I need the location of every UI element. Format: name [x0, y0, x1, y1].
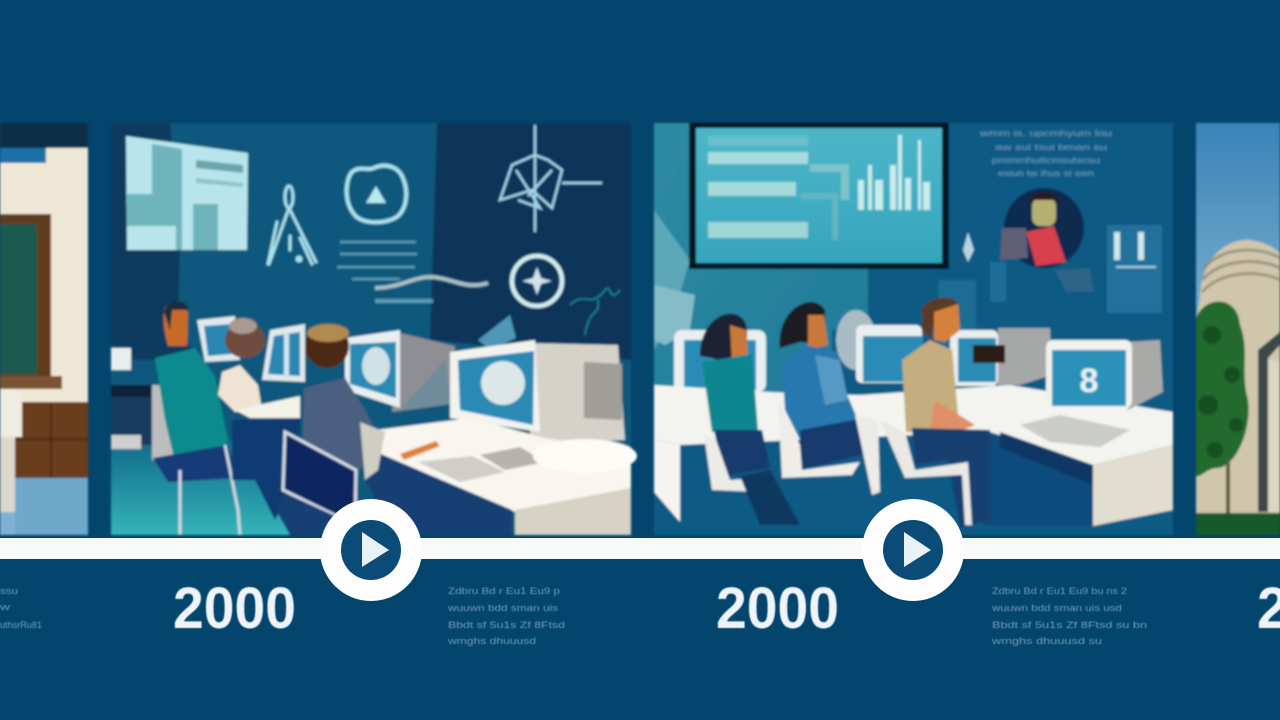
wall card: right: [1107, 225, 1162, 313]
timeline node 2: play button: [862, 499, 964, 601]
caption text above portrait: wmm is. upcmhyum Iou: [978, 129, 1112, 138]
caption text right: Bbdt sf 5u1s Zf 8Ftsd su bn: [992, 620, 1147, 630]
desk: [654, 385, 1173, 526]
bar chart on screen: [858, 135, 930, 210]
equipment: grey vase: [836, 310, 876, 370]
side cart and chairs: [111, 348, 182, 460]
caption text above portrait: pmmmhuttcmsutscsu: [992, 156, 1100, 165]
caption text above portrait: aw sui tsui bman su: [995, 143, 1107, 152]
chair: front navy: [276, 432, 395, 535]
panel: campus building fragment: [1196, 123, 1280, 535]
timeline node 1: play button: [320, 499, 422, 601]
person: teal shirt: [153, 301, 240, 535]
person: seated centre: [218, 318, 300, 418]
caption text centre: wuuwn bdd sman uis: [447, 603, 559, 613]
icon: wavy probe: [375, 277, 488, 288]
portrait: presenter in circle: [1000, 188, 1094, 292]
caption text above portrait: [978, 129, 1112, 178]
caption text left: w: [0, 602, 11, 612]
monitor: front right: 8: [1080, 362, 1098, 400]
desk: [365, 418, 637, 535]
caption text right: wmghs dhuuusd su: [991, 636, 1102, 646]
panel: left classroom fragment: [0, 123, 88, 535]
panel: computer lab with presentation: [654, 123, 1173, 535]
back monitors: [197, 316, 305, 382]
wall card: left: [938, 232, 1006, 350]
caption text above portrait: ewun tw ihus st swn: [998, 169, 1094, 178]
caption text right: wuuwn bdd sman uis usd: [991, 603, 1122, 613]
icon: faint chart scribble: [570, 288, 620, 335]
caption text centre: [447, 586, 565, 646]
domed building: [1196, 240, 1280, 515]
person: blue shirt: [778, 302, 880, 495]
person: slate jacket: [303, 324, 385, 480]
text lines on wall: [337, 242, 433, 301]
year label 2: 2000: [716, 576, 839, 641]
navy table mid: [232, 418, 300, 520]
person: teal shirt: [700, 314, 800, 525]
monitor: front right: [1046, 340, 1163, 410]
caption text centre: wmghs dhuuusd: [447, 636, 536, 646]
tree: [1196, 302, 1249, 476]
monitor: centre back: [856, 325, 1052, 386]
timeline bar: [0, 538, 1280, 559]
panel: computer lab with diagrams: [111, 123, 637, 535]
icon: compass sketch: [268, 186, 316, 264]
icon: molecule sketch: [500, 125, 602, 232]
caption text left: uthsrRu81: [0, 620, 42, 630]
caption text left: [0, 586, 42, 630]
caption text right: Zdbru Bd r Eu1 Eu9 bu ns 2: [992, 586, 1127, 596]
caption text left: ssu: [0, 586, 18, 596]
paper slip: [478, 315, 516, 350]
year label 1: 2000: [173, 576, 296, 641]
monitor: large: [450, 340, 625, 445]
caption text centre: Zdbru Bd r Eu1 Eu9 p: [448, 586, 560, 596]
person: khaki shirt: [880, 298, 990, 528]
caption text centre: Bbdt sf 5u1s Zf 8Ftsd: [448, 620, 565, 630]
presentation screen: [689, 123, 949, 269]
caption text right: [991, 586, 1147, 646]
monitor: left back: [674, 330, 766, 392]
icon: ring with star: [512, 256, 562, 306]
icon: ring badge: [347, 166, 406, 222]
wall screen: [126, 136, 248, 250]
monitor: middle: [345, 330, 455, 412]
